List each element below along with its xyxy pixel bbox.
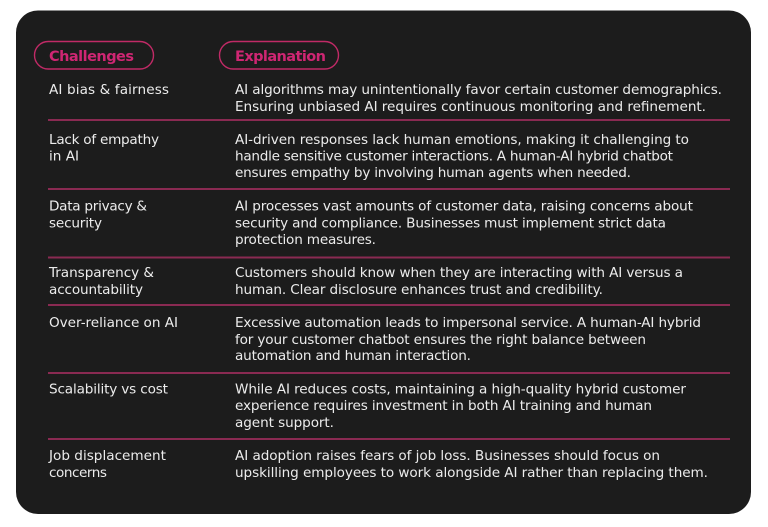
row: Over-reliance on AI: Over-reliance on AI xyxy=(49,315,178,331)
row: Over-reliance on AI: automation and human interaction. xyxy=(235,348,471,364)
heading pill: Explanation xyxy=(220,42,338,69)
row: Scalability vs cost: experience requires investment in both AI training and human xyxy=(235,398,652,414)
row: Transparency & accountability: accountability xyxy=(49,282,143,298)
row: AI bias & fairness xyxy=(49,82,722,115)
row: Transparency & accountability xyxy=(48,265,683,298)
heading pill: Challenges xyxy=(34,42,154,69)
row: AI bias & fairness: AI bias & fairness xyxy=(49,82,169,98)
row: Transparency & accountability: human. Clear disclosure enhances trust and credibility. xyxy=(235,282,603,298)
row: Lack of empathy in AI: handle sensitive customer interactions. A human-AI hybrid chatbot xyxy=(235,149,673,165)
row: Scalability vs cost: While AI reduces costs, maintaining a high-quality hybrid customer xyxy=(235,382,686,398)
row: Transparency & accountability: Customers should know when they are interacting with AI versus a xyxy=(235,265,683,281)
row: Scalability vs cost: agent support. xyxy=(235,415,334,431)
row: Job displacement concerns: upskilling employees to work alongside AI rather than replacing them. xyxy=(235,465,708,481)
row: Over-reliance on AI xyxy=(49,315,701,364)
row: Lack of empathy in AI xyxy=(49,132,689,181)
row: Job displacement concerns: Job displacement xyxy=(48,448,166,464)
row: Lack of empathy in AI: ensures empathy by involving human agents when needed. xyxy=(235,165,631,181)
row: Scalability vs cost xyxy=(49,382,686,431)
heading pill: Explanation: Explanation xyxy=(235,49,326,65)
row: AI bias & fairness: AI algorithms may unintentionally favor certain customer demographics. xyxy=(235,82,722,98)
row: Job displacement concerns: AI adoption raises fears of job loss. Businesses should focus on xyxy=(235,448,660,464)
row: Over-reliance on AI: for your customer chatbot ensures the right balance between xyxy=(235,332,646,348)
heading pill: Challenges: Challenges xyxy=(49,49,134,65)
row: Data privacy & security: security and compliance. Businesses must implement strict data xyxy=(235,215,666,231)
row: AI bias & fairness: Ensuring unbiased AI requires continuous monitoring and refinement. xyxy=(235,99,706,115)
row: Data privacy & security: AI processes vast amounts of customer data, raising concerns about xyxy=(235,199,693,215)
row: Lack of empathy in AI: Lack of empathy xyxy=(49,132,159,148)
row: Transparency & accountability: Transparency & xyxy=(48,265,154,281)
row: Data privacy & security: Data privacy & xyxy=(49,199,147,215)
row: Data privacy & security xyxy=(49,199,693,248)
row: Data privacy & security: security xyxy=(49,215,102,231)
row: Lack of empathy in AI: AI-driven responses lack human emotions, making it challenging to xyxy=(235,132,689,148)
row: Data privacy & security: protection measures. xyxy=(235,232,376,248)
row: Lack of empathy in AI: in AI xyxy=(49,149,79,165)
row: Job displacement concerns xyxy=(48,448,708,481)
row: Scalability vs cost: Scalability vs cost xyxy=(49,382,168,398)
row: Job displacement concerns: concerns xyxy=(49,465,107,481)
row: Over-reliance on AI: Excessive automation leads to impersonal service. A human-AI hybrid xyxy=(235,315,701,331)
